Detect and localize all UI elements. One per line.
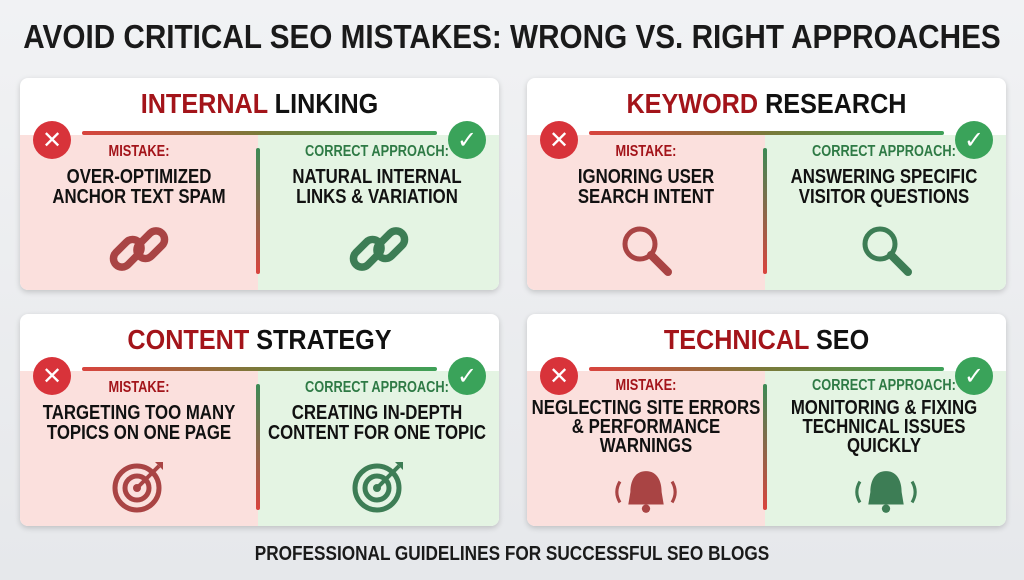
mistake label: MISTAKE:: [109, 379, 169, 396]
mistake text: ANCHOR TEXT SPAM: [52, 186, 226, 208]
correct text: QUICKLY: [847, 435, 921, 457]
icon: x: [540, 357, 578, 395]
icon: check: ✓: [964, 126, 984, 154]
mistake text: SEARCH INTENT: [578, 186, 714, 208]
icon: bell red: [615, 471, 677, 513]
icon: check: [955, 357, 993, 395]
correct text: MONITORING & FIXING: [791, 397, 977, 419]
correct text: CONTENT FOR ONE TOPIC: [268, 422, 486, 444]
correct text: [791, 166, 977, 208]
correct text: ANSWERING SPECIFIC: [791, 166, 977, 188]
panel: content strategy: [20, 314, 499, 526]
mistake text: NEGLECTING SITE ERRORS: [532, 397, 760, 419]
icon: x: [33, 357, 71, 395]
correct text: TECHNICAL ISSUES: [802, 416, 966, 438]
footer: PROFESSIONAL GUIDELINES FOR SUCCESSFUL SEO BLOGS: [255, 543, 769, 565]
mistake text: IGNORING USER: [578, 166, 714, 188]
icon: target red: [112, 462, 163, 512]
correct label: CORRECT APPROACH:: [305, 143, 449, 160]
mistake text: TARGETING TOO MANY: [43, 402, 235, 424]
mistake text: [532, 397, 760, 457]
correct text: [791, 397, 977, 457]
panel heading: TECHNICAL SEO: [664, 324, 869, 355]
panel heading: CONTENT STRATEGY: [127, 324, 392, 355]
correct label: CORRECT APPROACH:: [812, 377, 956, 394]
icon: broken link red: [110, 227, 168, 271]
mistake label: MISTAKE:: [109, 143, 169, 160]
icon: magnifier green: [862, 226, 912, 276]
icon: check: [448, 121, 486, 159]
panel: technical seo: [527, 314, 1006, 526]
icon: target green: [352, 462, 403, 512]
icon: bell green: [855, 471, 917, 513]
panel heading: KEYWORD RESEARCH: [626, 88, 907, 119]
mistake text: [578, 166, 714, 208]
panel heading: INTERNAL LINKING: [141, 88, 378, 119]
panel: internal linking: [20, 78, 499, 290]
mistake text: TOPICS ON ONE PAGE: [47, 422, 231, 444]
title: AVOID CRITICAL SEO MISTAKES: WRONG VS. RIGHT APPROACHES: [23, 18, 1001, 55]
icon: check: [448, 357, 486, 395]
mistake text: [42, 402, 235, 444]
icon: magnifier red: [622, 226, 672, 276]
icon: check: [955, 121, 993, 159]
mistake label: MISTAKE:: [616, 143, 676, 160]
icon: check: ✓: [457, 126, 477, 154]
icon: x: ✕: [549, 362, 569, 390]
icon: x: ✕: [42, 362, 62, 390]
icon: x: ✕: [42, 126, 62, 154]
mistake text: OVER-OPTIMIZED: [67, 166, 211, 188]
mistake label: MISTAKE:: [616, 377, 676, 394]
correct text: [292, 166, 462, 208]
icon: x: ✕: [549, 126, 569, 154]
correct label: CORRECT APPROACH:: [305, 379, 449, 396]
mistake text: & PERFORMANCE: [572, 416, 720, 438]
correct text: CREATING IN-DEPTH: [292, 402, 462, 424]
correct text: NATURAL INTERNAL: [292, 166, 462, 188]
icon: x: [33, 121, 71, 159]
icon: x: [540, 121, 578, 159]
mistake text: [52, 166, 226, 208]
icon: link green: [350, 227, 408, 271]
correct text: VISITOR QUESTIONS: [799, 186, 969, 208]
correct text: LINKS & VARIATION: [296, 186, 458, 208]
correct label: CORRECT APPROACH:: [812, 143, 956, 160]
correct text: [268, 402, 486, 444]
icon: check: ✓: [457, 362, 477, 390]
mistake text: WARNINGS: [600, 435, 692, 457]
icon: check: ✓: [964, 362, 984, 390]
panel: keyword research: [527, 78, 1006, 290]
